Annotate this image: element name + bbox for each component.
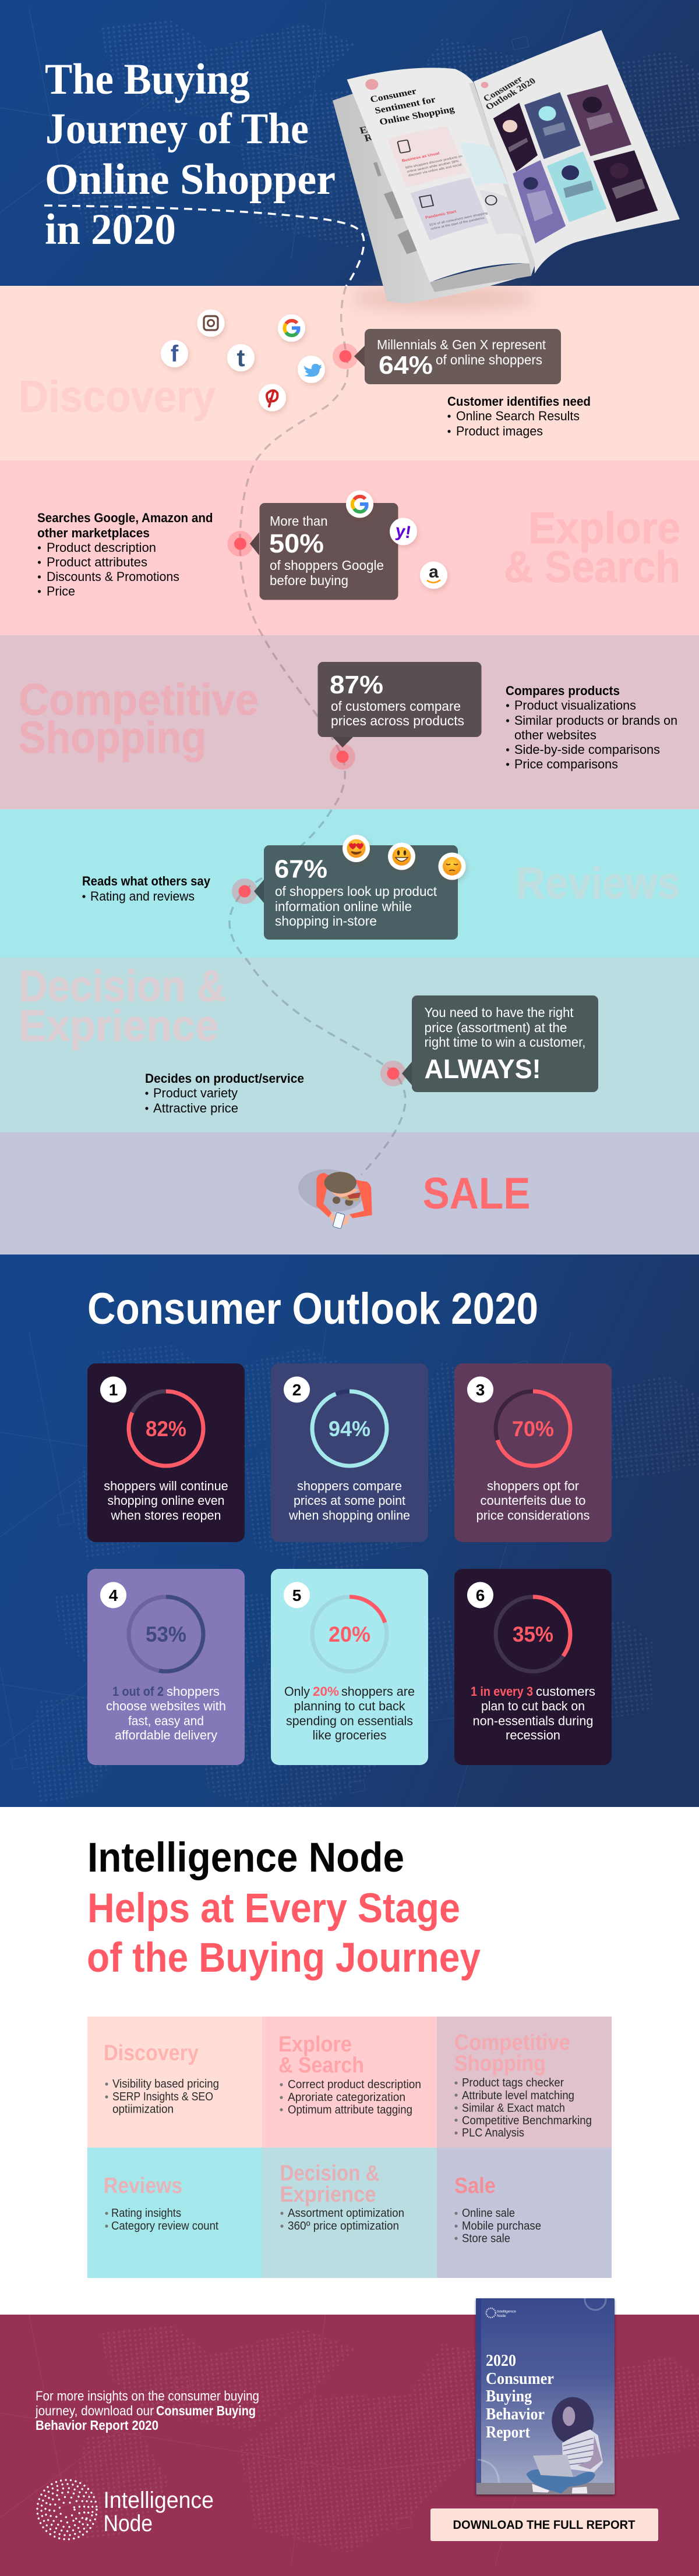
text: searches google: Price	[47, 584, 75, 598]
icon: facebook	[161, 340, 188, 367]
callout: 87 percent	[318, 662, 481, 747]
title: in 2020	[45, 205, 176, 254]
grid cell: reviews: Reviews	[104, 2174, 182, 2198]
card 2: 94 percent: 2	[292, 1381, 301, 1399]
journey dashed path	[44, 205, 405, 1175]
text: customer identifies need	[447, 394, 591, 438]
card 1: 82 percent: 1	[109, 1381, 118, 1399]
card 5: 20 percent: shoppers are	[341, 1684, 415, 1699]
icon: smile emoji	[388, 843, 415, 870]
left page content	[365, 79, 525, 240]
card 3: 70 percent: 70%	[512, 1417, 554, 1441]
cover logo: Intelligence	[497, 2310, 516, 2313]
text: searches google: other marketplaces	[37, 526, 150, 540]
report cover	[476, 2289, 615, 2494]
grid cell: discovery	[87, 2017, 262, 2148]
text: searches google: Product attributes	[47, 555, 147, 569]
ghost heading: Competitive Shopping: Shopping	[19, 713, 206, 763]
cover title	[486, 2352, 554, 2442]
icon: heart eyes emoji	[343, 835, 370, 862]
grid cell: explore and search	[262, 2017, 437, 2148]
left page content: 31% of all consumers were shopping	[429, 212, 488, 227]
callout: 64 percent: of online shoppers	[436, 352, 542, 367]
grid cell: explore and search: Optimum attribute tagging	[288, 2104, 412, 2117]
title	[45, 55, 336, 254]
footer text: journey, download our	[35, 2403, 154, 2418]
grid cell: discovery: Discovery	[104, 2041, 199, 2065]
text: customer identifies need: Online Search Results	[456, 409, 580, 423]
callout: 67 percent: 67%	[274, 855, 327, 884]
cover title: Behavior	[486, 2405, 545, 2423]
cover logo: Node	[497, 2314, 506, 2318]
callout: 64 percent: Millennials & Gen X represent	[377, 337, 546, 352]
left page content: online at the start of the pandemic	[430, 217, 485, 231]
card 1: 82 percent: shopping online even	[107, 1493, 225, 1508]
card 4: 53 percent: choose websites with	[106, 1699, 226, 1713]
callout: 87 percent: prices across products	[331, 713, 464, 728]
grid cell: competitive shopping	[437, 2017, 612, 2148]
icon: google search	[346, 490, 373, 518]
hero background	[0, 0, 699, 286]
grid cell: competitive shopping: Product tags checker	[462, 2077, 564, 2089]
footer text: For more insights on the consumer buying	[36, 2388, 259, 2403]
text: searches google: Product description	[47, 540, 156, 555]
text: decides on product: Product variety	[153, 1086, 238, 1100]
heading: intelligence node helps: of the Buying Journey	[87, 1935, 481, 1981]
card 5: 20 percent: Only	[284, 1684, 310, 1699]
cover title: Consumer	[486, 2370, 554, 2388]
left page content: Pandemic Start	[425, 210, 457, 220]
grid cell: explore and search: Correct product description	[288, 2078, 421, 2091]
card 5: 20 percent: 20%	[329, 1622, 370, 1646]
grid cell: discovery: Visibility based pricing	[112, 2078, 219, 2090]
right page content: Consumer	[482, 75, 525, 104]
ghost heading: Competitive Shopping: Competitive	[19, 675, 259, 725]
ghost heading: Decision and Exprience: Decision &	[19, 962, 226, 1011]
open report book mockup	[333, 30, 680, 304]
grid cell: sale	[437, 2148, 612, 2278]
text: compares products: Similar products or brands on	[514, 713, 677, 728]
icon: pinterest	[259, 384, 286, 411]
right page content: Outlook 2020	[484, 76, 538, 112]
text: reads what others say: Reads what others say	[82, 874, 211, 888]
text: customer identifies need: Product images	[456, 424, 543, 438]
card 5: 20 percent: spending on essentials	[286, 1714, 413, 1728]
card 6: 35 percent: 6	[476, 1586, 485, 1604]
left page content: Business as Usual	[401, 151, 440, 163]
callout: 67 percent: information online while	[275, 899, 412, 914]
ghost heading: Decision and Exprience	[19, 962, 226, 1051]
grid cell: explore and search: Aproriate categorization	[288, 2091, 405, 2104]
card 4: 53 percent: affordable delivery	[115, 1728, 217, 1742]
grid cell: reviews: Category review count	[111, 2220, 218, 2233]
cover title: Report	[486, 2423, 531, 2442]
callout: 87 percent: 87%	[330, 671, 383, 699]
grid cell: discovery: optiimization	[112, 2103, 174, 2116]
spine shadow	[469, 83, 535, 275]
grid cell: competitive shopping: Shopping	[454, 2051, 546, 2076]
card 5: 20 percent: 5	[292, 1586, 301, 1604]
icon: yahoo: y!	[394, 521, 412, 543]
grid cell: explore and search: & Search	[278, 2053, 364, 2078]
icon: tumblr	[227, 344, 255, 371]
footer background	[0, 2308, 699, 2576]
card 5: 20 percent: planning to cut back	[294, 1699, 405, 1713]
logo: intelligence node: Node	[104, 2511, 153, 2536]
icon: facebook: f	[171, 341, 179, 367]
icon: instagram	[197, 310, 225, 336]
card 6: 35 percent: recession	[506, 1728, 560, 1742]
callout: 64 percent	[354, 329, 561, 384]
card 4: 53 percent: 4	[109, 1586, 118, 1604]
grid cell: decision and experience	[262, 2148, 437, 2278]
icon: twitter	[298, 356, 325, 383]
text: searches google: Discounts & Promotions	[47, 569, 179, 584]
band: sale	[0, 1132, 699, 1255]
icon: tumblr: t	[236, 344, 245, 371]
left page content: Consumer	[369, 86, 418, 105]
logo: intelligence node: Intelligence	[104, 2488, 214, 2513]
callout: 50 percent: before buying	[270, 573, 348, 588]
card 2: 94 percent	[271, 1363, 428, 1542]
callout: 50 percent	[250, 503, 398, 600]
text: compares products: Compares products	[506, 683, 620, 698]
card 6: 35 percent	[454, 1569, 612, 1765]
left page content: online search while another 38%	[407, 160, 459, 173]
band: reviews	[0, 809, 699, 958]
grid cell: decision and experience: Decision &	[280, 2161, 380, 2185]
footer text: Behavior Report 2020	[36, 2418, 158, 2433]
grid cell: decision and experience: Assortment optimization	[288, 2207, 404, 2220]
ghost heading: Explore and Search	[504, 504, 680, 592]
card 1: 82 percent: when stores reopen	[111, 1508, 221, 1523]
text: compares products: Price comparisons	[514, 757, 618, 771]
footer text: Consumer Buying	[156, 2403, 256, 2418]
card 5: 20 percent: 20%	[313, 1684, 339, 1699]
card 1: 82 percent: 82%	[146, 1417, 186, 1441]
card 1: 82 percent	[87, 1363, 245, 1542]
left page content: Online Shopping	[379, 104, 456, 127]
ghost heading: Explore and Search: Explore	[528, 504, 680, 553]
grid cell: competitive shopping: Attribute level matching	[462, 2089, 574, 2102]
icon: yahoo	[390, 518, 417, 545]
card 3: 70 percent	[454, 1363, 612, 1542]
callout: 50 percent: 50%	[269, 529, 324, 558]
cover title: Buying	[486, 2387, 532, 2405]
icon: amazon	[420, 561, 447, 589]
card 6: 35 percent: non-essentials during	[473, 1714, 593, 1728]
heading: intelligence node helps	[87, 1835, 481, 1981]
card 4: 53 percent	[87, 1569, 245, 1765]
left page	[347, 68, 535, 282]
grid cell: decision and experience: Exprience	[280, 2182, 376, 2207]
callout: always: right time to win a customer,	[424, 1034, 586, 1050]
cover logo	[486, 2308, 516, 2318]
card 4: 53 percent: shoppers	[167, 1684, 220, 1699]
text: reads what others say: Rating and reviews	[90, 889, 195, 903]
grid cell: competitive shopping: PLC Analysis	[462, 2127, 524, 2139]
footer text	[35, 2388, 259, 2433]
ghost heading: Reviews: Reviews	[516, 859, 680, 908]
title: Journey of The	[45, 105, 309, 153]
callout: 67 percent: shopping in-store	[275, 913, 377, 929]
text: decides on product: Attractive price	[153, 1101, 238, 1115]
decision stop marker	[380, 1061, 406, 1086]
card 2: 94 percent: shoppers compare	[297, 1479, 402, 1493]
heading: intelligence node helps: Intelligence Node	[87, 1835, 404, 1881]
card 5: 20 percent	[271, 1569, 428, 1765]
ghost heading: Decision and Exprience: Exprience	[19, 1001, 218, 1051]
card 6: 35 percent: plan to cut back on	[481, 1699, 585, 1713]
title: The Buying	[45, 55, 250, 104]
download button: DOWNLOAD THE FULL REPORT	[453, 2518, 636, 2532]
callout: always: price (assortment) at the	[424, 1020, 567, 1035]
band: decision and experience	[0, 958, 699, 1132]
text: searches google	[37, 511, 213, 598]
callout: 50 percent: of shoppers Google	[270, 558, 384, 573]
explore stop marker	[227, 531, 253, 557]
competitive stop marker	[330, 744, 355, 770]
title: Online Shopper	[45, 155, 336, 204]
right page content	[481, 75, 658, 243]
grid cell: decision and experience: 360º price optimization	[288, 2220, 399, 2233]
callout: 50 percent: More than	[270, 513, 327, 529]
card 3: 70 percent: counterfeits due to	[480, 1493, 586, 1508]
under page	[333, 94, 532, 304]
card 3: 70 percent: 3	[476, 1381, 485, 1399]
grid cell: sale: Sale	[454, 2174, 496, 2198]
text: decides on product: Decides on product/service	[145, 1071, 304, 1086]
text: compares products	[506, 683, 677, 771]
open report book mockup: R	[363, 132, 375, 144]
download button	[430, 2508, 658, 2541]
callout: 67 percent	[254, 845, 458, 940]
card 1: 82 percent: shoppers will continue	[104, 1479, 228, 1493]
callout: always	[402, 995, 598, 1092]
band: discovery	[0, 286, 699, 460]
grid cell: sale: Mobile purchase	[462, 2220, 541, 2233]
icon: amazon: a	[429, 562, 439, 582]
icon: sad emoji	[438, 852, 466, 880]
band: competitive shopping	[0, 635, 699, 809]
text: customer identifies need: Customer identifies need	[447, 394, 591, 409]
card 4: 53 percent: fast, easy and	[128, 1714, 204, 1728]
left page content: discover via online ads and social	[408, 164, 462, 178]
reviews stop marker	[232, 878, 257, 904]
left page content: 56% shoppers discover products on	[405, 155, 463, 170]
card 3: 70 percent: price considerations	[476, 1508, 589, 1523]
grid cell: explore and search: Explore	[278, 2032, 352, 2057]
open report book mockup: E	[358, 124, 369, 136]
callout: 67 percent: of shoppers look up product	[275, 884, 437, 899]
grid cell: reviews: Rating insights	[111, 2207, 181, 2220]
card 3: 70 percent: shoppers opt for	[487, 1479, 579, 1493]
grid cell: reviews	[87, 2148, 262, 2278]
card 6: 35 percent: 35%	[513, 1622, 553, 1646]
logo: intelligence node	[36, 2479, 214, 2540]
card 4: 53 percent: 1 out of 2	[112, 1684, 164, 1699]
card 4: 53 percent: 53%	[146, 1622, 186, 1646]
card 6: 35 percent: customers	[536, 1684, 595, 1699]
callout: always: ALWAYS!	[424, 1054, 541, 1084]
text: compares products: Side-by-side comparisons	[514, 742, 660, 757]
text: decides on product	[145, 1071, 304, 1115]
text: compares products: Product visualizations	[514, 698, 636, 713]
card 2: 94 percent: when shopping online	[288, 1508, 410, 1523]
card 5: 20 percent: like groceries	[312, 1728, 387, 1742]
cover title: 2020	[486, 2352, 516, 2370]
ghost heading: Explore and Search: & Search	[504, 543, 680, 592]
cover woman with laptop	[526, 2397, 603, 2493]
card 6: 35 percent: 1 in every 3	[471, 1684, 533, 1699]
card 2: 94 percent: prices at some point	[294, 1493, 405, 1508]
heading: intelligence node helps: Helps at Every Stage	[87, 1886, 460, 1932]
callout: 87 percent: of customers compare	[331, 699, 461, 714]
heading: sale: SALE	[423, 1169, 530, 1218]
text: compares products: other websites	[514, 728, 596, 742]
right page	[474, 30, 680, 274]
grid cell: competitive shopping: Competitive Benchmarking	[462, 2114, 592, 2127]
consumer outlook section	[0, 1255, 699, 1828]
book shadow	[350, 286, 536, 310]
callout: 64 percent: 64%	[379, 351, 433, 380]
grid cell: competitive shopping: Similar & Exact match	[462, 2102, 565, 2114]
text: searches google: Searches Google, Amazon and	[37, 511, 213, 525]
ghost heading: Competitive Shopping	[19, 675, 259, 763]
card 2: 94 percent: 94%	[329, 1417, 370, 1441]
grid cell: competitive shopping: Competitive	[454, 2031, 570, 2055]
left page content: Sentiment for	[373, 94, 437, 116]
text: reads what others say	[82, 874, 211, 903]
callout: always: You need to have the right	[424, 1005, 574, 1020]
heading: consumer outlook 2020: Consumer Outlook 2020	[87, 1284, 538, 1334]
grid cell: sale: Online sale	[462, 2207, 515, 2220]
icon: google	[278, 314, 305, 342]
ghost heading: Discovery: Discovery	[19, 372, 216, 421]
band: explore and search	[0, 460, 699, 635]
illustration: shopper from above	[295, 1165, 372, 1229]
grid cell: discovery: SERP Insights & SEO	[112, 2090, 213, 2103]
discovery stop marker	[333, 343, 358, 369]
grid cell: sale: Store sale	[462, 2232, 510, 2245]
bottom page block	[430, 263, 535, 292]
